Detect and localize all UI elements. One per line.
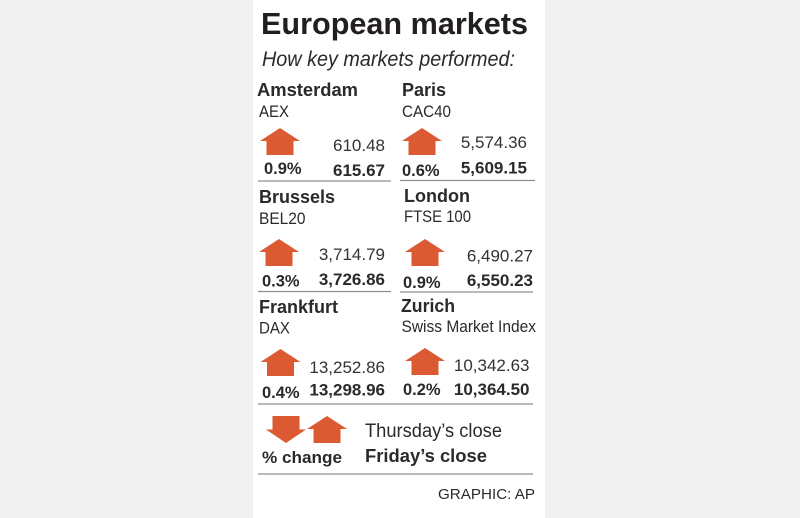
- panel: Amsterdam: 615.67: [333, 161, 385, 180]
- legend: [258, 416, 533, 474]
- legend: Friday’s close: [365, 445, 487, 466]
- panel: Paris: CAC40: [402, 102, 451, 121]
- title: European markets: [261, 6, 528, 41]
- panel: Frankfurt: [259, 297, 385, 402]
- legend: Thursday’s close: [365, 421, 502, 442]
- subtitle: How key markets performed:: [262, 48, 515, 71]
- panel: London: [400, 186, 533, 292]
- panel: Zurich: 10,364.50: [454, 380, 530, 399]
- panel: Brussels: [258, 187, 391, 292]
- panel: Amsterdam: AEX: [259, 102, 289, 121]
- panel: Brussels: Brussels: [259, 187, 335, 207]
- panel: Frankfurt: DAX: [259, 318, 290, 338]
- panel: background: [253, 0, 545, 518]
- panel: Brussels: 3,726.86: [319, 270, 385, 289]
- panel: Amsterdam: 0.9%: [264, 160, 302, 178]
- legend: % change: [262, 448, 342, 467]
- panel: Paris: Paris: [402, 80, 446, 100]
- panel: Paris: 5,574.36: [461, 133, 527, 152]
- panel: Zurich: Zurich: [401, 296, 455, 316]
- panel: Zurich: 10,342.63: [454, 356, 530, 375]
- panel: Amsterdam: Amsterdam: [257, 80, 358, 100]
- icon: up arrow: [307, 416, 347, 443]
- panel: Frankfurt: 0.4%: [262, 384, 300, 402]
- panel: London: FTSE 100: [404, 207, 471, 226]
- panel: Amsterdam: [257, 80, 391, 181]
- panel: Zurich: [258, 296, 536, 404]
- icon: down arrow: [266, 416, 306, 443]
- panel: Paris: 0.6%: [402, 162, 440, 180]
- panel: Brussels: BEL20: [259, 209, 306, 228]
- panel: Paris: 5,609.15: [461, 158, 527, 178]
- panel: Frankfurt: 13,298.96: [309, 380, 385, 400]
- panel: Paris: [400, 80, 535, 180]
- panel: London: 6,550.23: [467, 271, 533, 290]
- panel: London: 6,490.27: [467, 246, 533, 266]
- panel: Brussels: 0.3%: [262, 272, 300, 290]
- panel: Amsterdam: 610.48: [333, 136, 385, 155]
- panel: London: London: [404, 186, 470, 206]
- panel: Frankfurt: Frankfurt: [259, 297, 338, 317]
- panel: Zurich: 0.2%: [403, 381, 441, 399]
- panel: Zurich: Swiss Market Index: [402, 317, 536, 336]
- panel: London: 0.9%: [403, 274, 441, 292]
- panel: Frankfurt: 13,252.86: [309, 358, 385, 377]
- credit: GRAPHIC: AP: [438, 487, 535, 503]
- panel: Brussels: 3,714.79: [319, 245, 385, 264]
